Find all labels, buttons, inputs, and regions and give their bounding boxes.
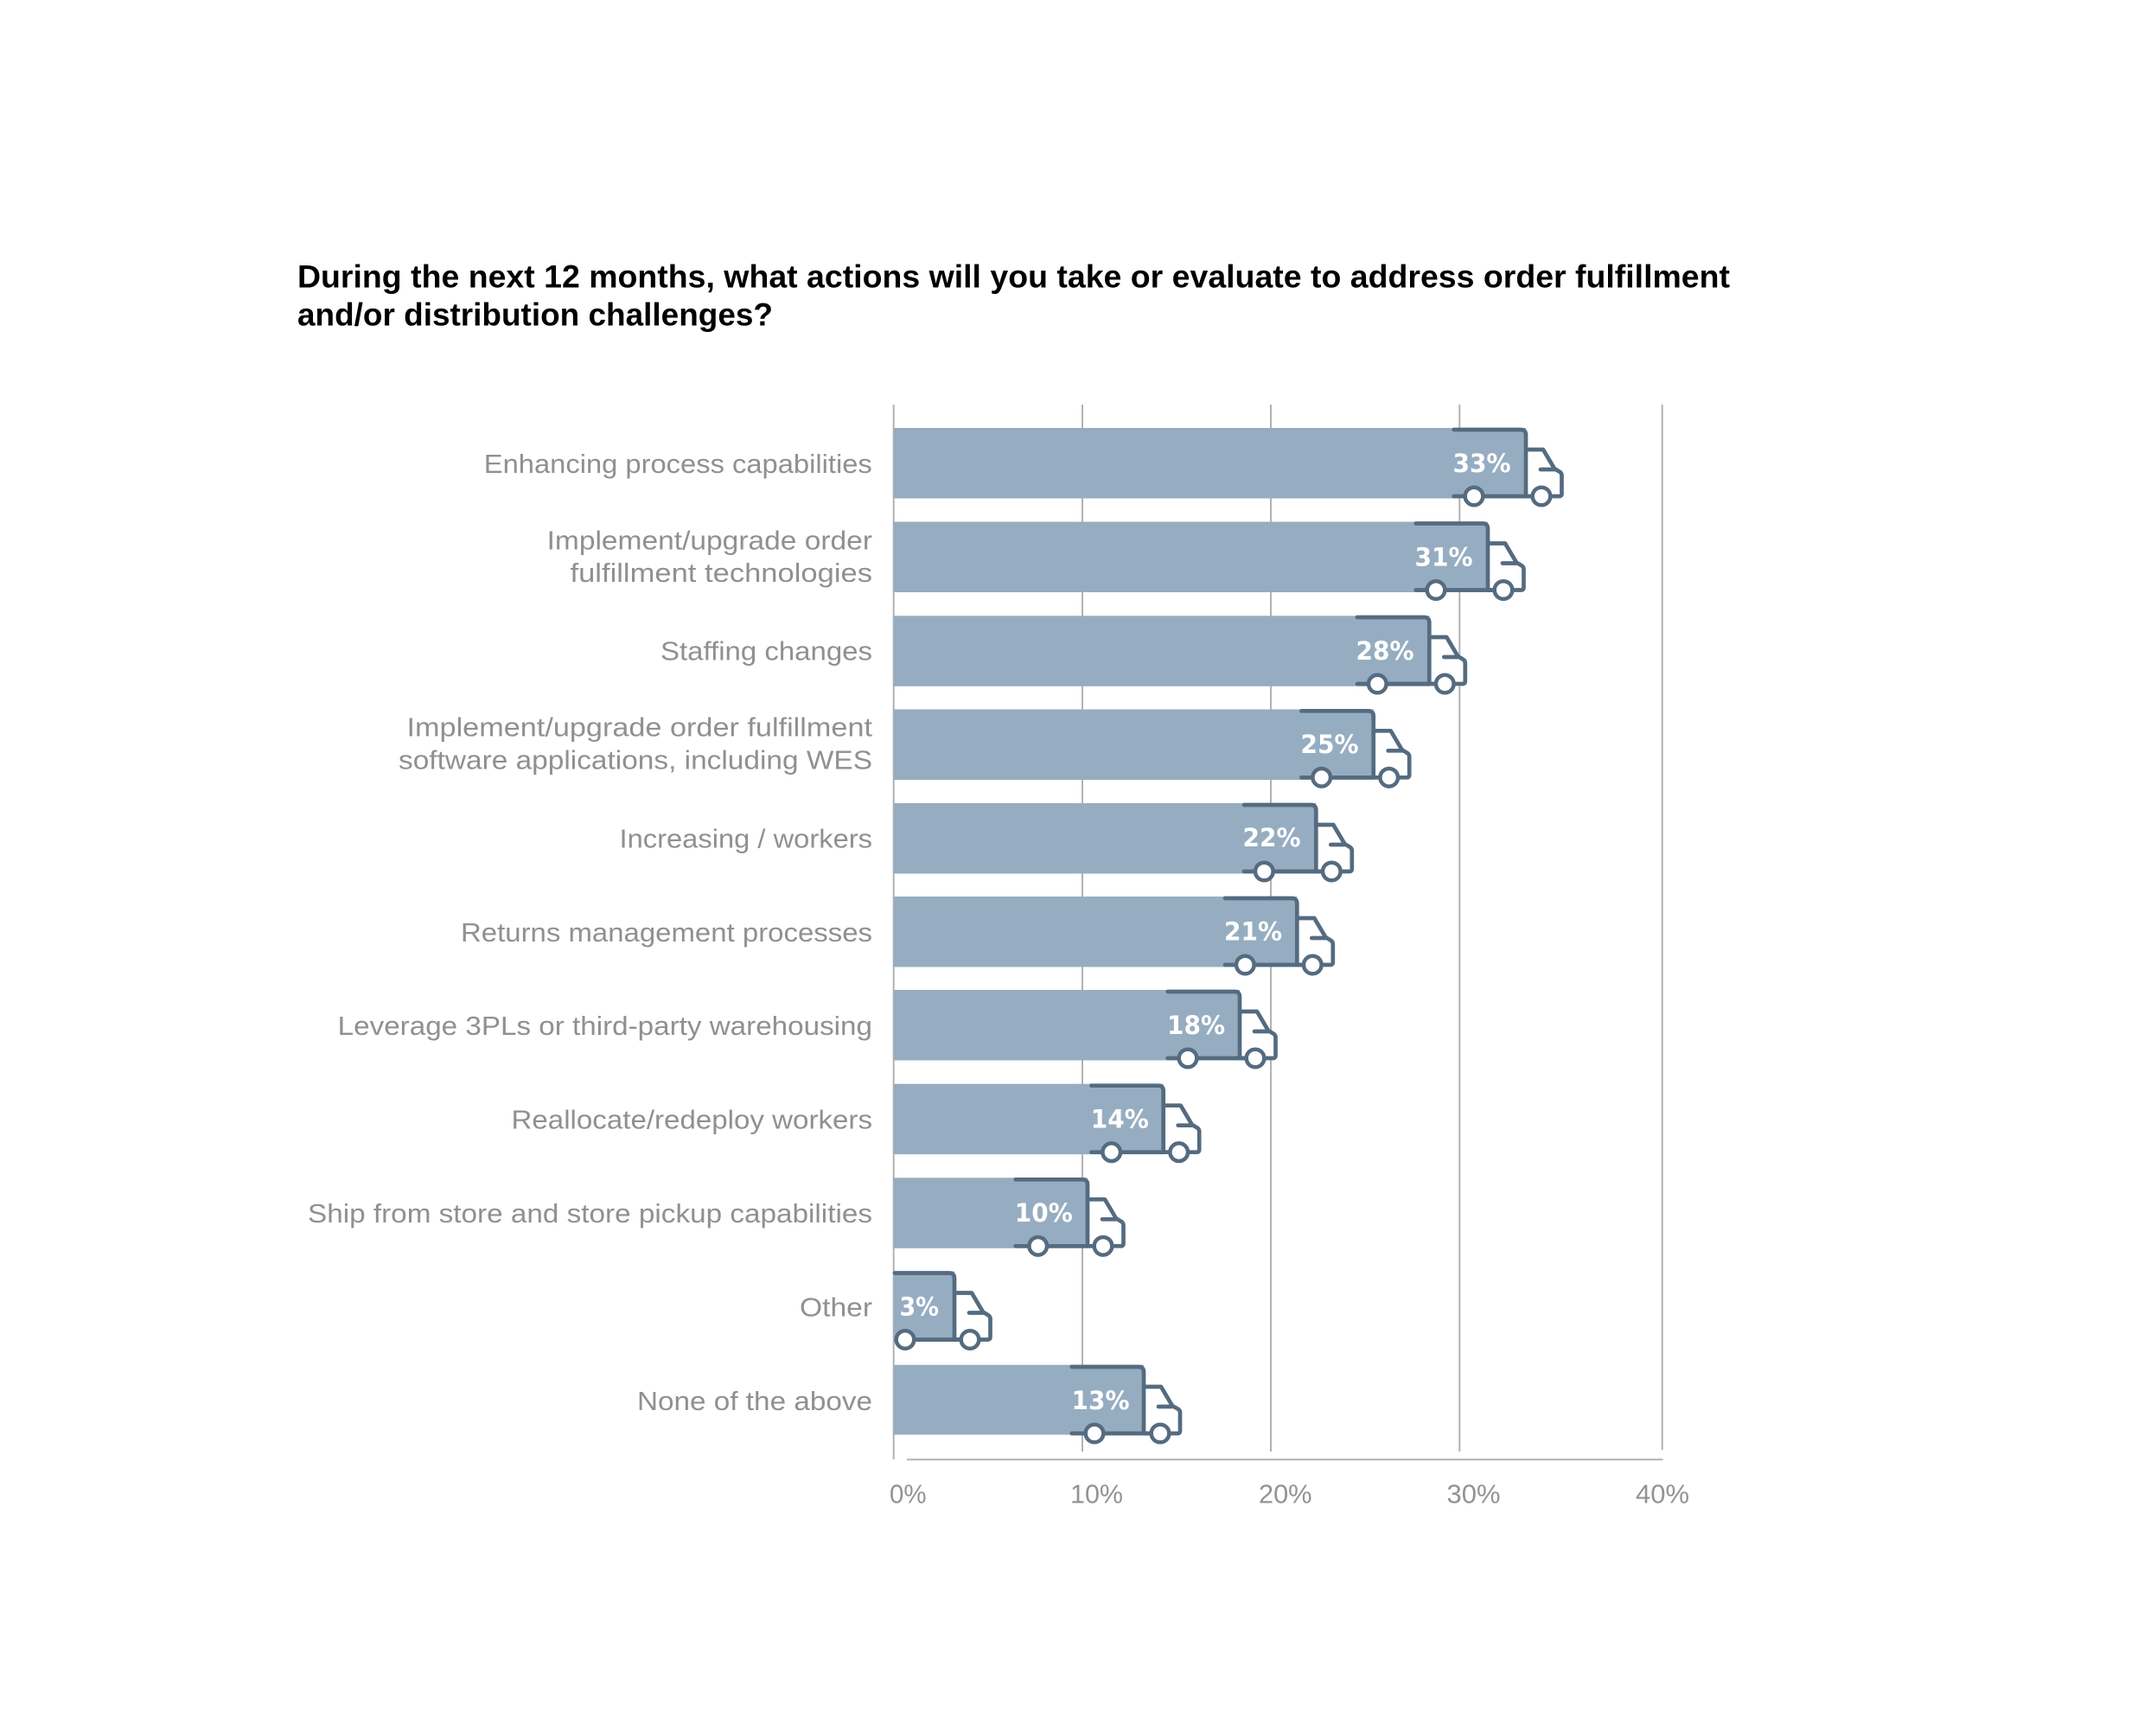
x axis labels: 10%: [1070, 1478, 1123, 1509]
value: 18%: [1167, 1011, 1225, 1040]
row: Increasing / workers 22%: [619, 803, 1352, 880]
bar: [894, 803, 1316, 873]
category label: Reallocate/redeploy workers: [512, 1105, 872, 1134]
x axis labels: [890, 1478, 1689, 1509]
category label: Implement/upgrade order fulfillment: [406, 712, 872, 743]
icon: truck: [895, 1273, 991, 1349]
value: 28%: [1356, 636, 1414, 666]
bar: [894, 897, 1297, 967]
bar: [894, 522, 1488, 592]
value: 31%: [1414, 543, 1473, 572]
bar: [894, 990, 1240, 1060]
category label: Leverage 3PLs or third-party warehousing: [338, 1011, 872, 1041]
bar: [894, 616, 1429, 686]
category label: Ship from store and store pickup capabilities: [308, 1198, 872, 1229]
x axis labels: 0%: [890, 1478, 927, 1509]
value: 25%: [1300, 730, 1359, 759]
x axis labels: 20%: [1259, 1478, 1312, 1509]
category label: Other: [800, 1292, 872, 1323]
x axis labels: 40%: [1636, 1478, 1689, 1509]
category label: software applications, including WES: [399, 745, 872, 775]
value: 10%: [1015, 1198, 1073, 1228]
chart gridlines and axis: [894, 405, 1663, 1459]
title: [297, 258, 1731, 332]
category label: Enhancing process capabilities: [484, 449, 872, 479]
row: None of the above 13%: [637, 1365, 1180, 1442]
value: 14%: [1091, 1105, 1149, 1134]
icon: truck: [1225, 898, 1333, 973]
icon: truck: [1454, 430, 1561, 505]
row: Implement/upgrade order fulfillment technologies 31%: [547, 522, 1523, 599]
category label: Staffing changes: [660, 636, 872, 666]
bar: [894, 428, 1526, 498]
value: 13%: [1072, 1386, 1129, 1415]
bar: [894, 1084, 1164, 1154]
value: 33%: [1452, 449, 1511, 478]
category label: None of the above: [637, 1386, 872, 1416]
icon: truck: [1016, 1179, 1124, 1255]
category label: [399, 712, 872, 775]
category label: [547, 525, 872, 588]
icon: truck: [1301, 711, 1409, 787]
bar: [894, 709, 1374, 780]
icon: truck: [1416, 524, 1523, 599]
bar: [894, 1178, 1088, 1248]
row: Returns management processes 21%: [461, 897, 1333, 973]
icon: truck: [1357, 617, 1465, 692]
category label: Returns management processes: [461, 917, 872, 948]
bar: [894, 1365, 1144, 1435]
value: 22%: [1243, 823, 1300, 852]
title: During the next 12 months, what actions will you take or evaluate to address order fulfillment: [297, 258, 1731, 294]
row: Enhancing process capabilities 33%: [484, 428, 1561, 505]
bar: [894, 1271, 954, 1342]
category label: fulfillment technologies: [571, 558, 872, 588]
row: Leverage 3PLs or third-party warehousing 18%: [338, 990, 1276, 1067]
x axis labels: 30%: [1447, 1478, 1501, 1509]
value: 21%: [1224, 916, 1282, 946]
row: Ship from store and store pickup capabilities 10%: [308, 1178, 1124, 1255]
value: 3%: [899, 1292, 939, 1321]
row: Other 3%: [800, 1271, 991, 1349]
title: and/or distribution challenges?: [297, 296, 773, 332]
row: Implement/upgrade order fulfillment software applications, including WES 25%: [399, 709, 1409, 787]
icon: truck: [1072, 1367, 1180, 1442]
row: Reallocate/redeploy workers 14%: [512, 1084, 1199, 1161]
row: Staffing changes 28%: [660, 616, 1465, 692]
icon: truck: [1091, 1086, 1199, 1161]
icon: truck: [1244, 805, 1352, 880]
category label: Increasing / workers: [619, 824, 872, 854]
category label: Implement/upgrade order: [547, 525, 872, 555]
icon: truck: [1168, 992, 1276, 1067]
